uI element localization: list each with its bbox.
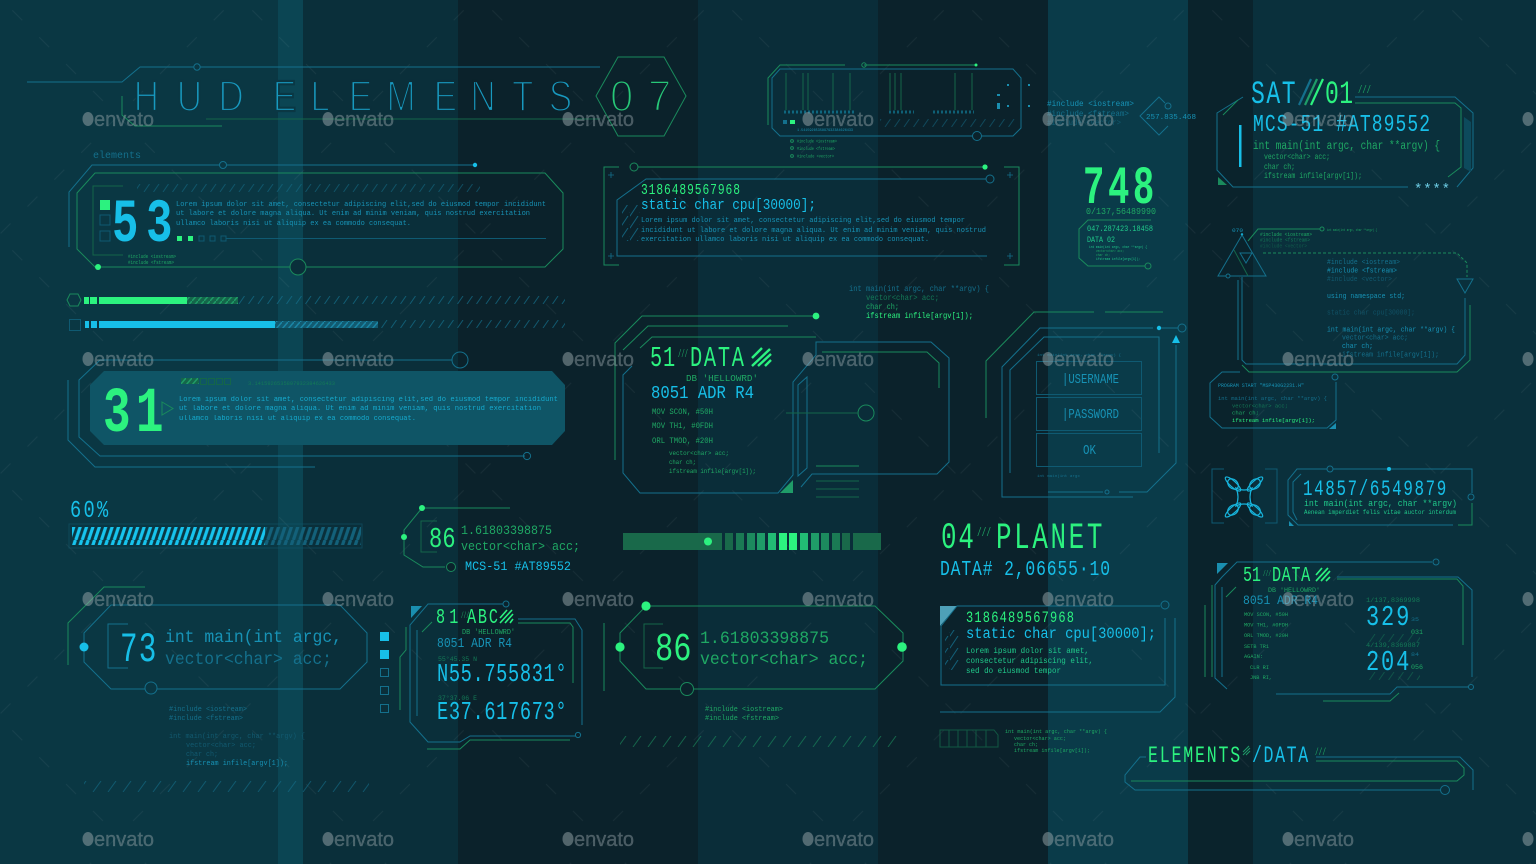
include list under chart: #include <iostream> [797, 138, 837, 144]
title: HUD ELEMENTS 07 [27, 57, 686, 136]
number block: 748: 0/137,56489990 [1086, 207, 1156, 217]
panel: 51 DATA right: CLR RI [1250, 665, 1269, 671]
panel: 81 ABC coordinates: 8051 ADR R4 [437, 636, 512, 652]
panel: static char upper: incididunt ut labore et dolore magna aliqua. Ut enim ad minim veniam, quis nostrud [641, 227, 986, 235]
panel: SAT 01: MCS-51 #AT89552 [1253, 112, 1430, 139]
panel: 51 DATA right [1205, 559, 1474, 701]
panel: 81 ABC coordinates: N55.755831° [437, 659, 567, 689]
panel: static char lower: static char cpu[30000]; [966, 625, 1156, 643]
panel: 51 DATA right: JNB RI, [1250, 675, 1272, 681]
panel: static char upper [604, 163, 1019, 265]
heading: ELEMENTS /DATA: /// [1315, 747, 1326, 759]
heading: ELEMENTS /DATA: ELEMENTS [1148, 744, 1240, 770]
panel: SAT 01: **** [1414, 182, 1450, 198]
panel: 51 DATA centre: char ch; [669, 459, 696, 466]
small code with block icons: char ch; [1014, 741, 1038, 748]
widget: small 86 readout: 86 [429, 523, 456, 556]
include list under chart: #include <vector> [797, 154, 834, 160]
small code with block icons: int main(int argc, char **argv) { [1005, 728, 1107, 735]
metric: 329: 35 [1411, 616, 1419, 623]
panel: static char lower [940, 601, 1175, 712]
panel: SAT 01: /// [1358, 85, 1371, 97]
panel: 81 ABC coordinates: 81 [436, 607, 458, 630]
panel: 81 ABC coordinates: E37.617673° [437, 697, 567, 727]
panel: 86 large readout: vector<char> acc; [700, 650, 868, 670]
panel: 53 text block: ullamco laboris nisi ut aliquip ex ea commodo consequat. [176, 220, 411, 228]
panel: static char lower: 3186489567968 [966, 610, 1074, 628]
panel: 31 filled text block: 3.1415926535897932384626433 [248, 381, 335, 387]
panel: SAT 01 [1217, 78, 1473, 198]
code block: centre: char ch; [866, 303, 899, 312]
code and diamond label top right: #include <vector> [1047, 119, 1121, 128]
panel: triangle code frame: char ch; [1342, 343, 1373, 351]
panel: 73 code readout [68, 587, 367, 694]
panel: 51 DATA centre: MOV SCON, #50H [652, 408, 713, 417]
metric: 329: 1/137,8369998 [1366, 597, 1420, 604]
panel: 51 DATA centre: MOV TH1, #0FDH [652, 422, 713, 431]
panel: 51 DATA right: SETB TR1 [1244, 644, 1269, 650]
field: password [1036, 398, 1142, 430]
code block: left bottom: #include <iostream> [169, 706, 247, 714]
watermarks: envato [1054, 829, 1114, 851]
watermarks: envato [574, 349, 634, 371]
panel: 73 code readout: 73 [120, 626, 156, 674]
watermarks: envato [1054, 109, 1114, 131]
panel: triangle code frame: #include <vector> [1260, 242, 1307, 250]
field: username [1036, 362, 1142, 394]
panel: program start: ifstream infile[argv[1]); [1232, 417, 1315, 424]
panel: program start: char ch; [1232, 410, 1259, 416]
watermarks: envato [94, 109, 154, 131]
panel: login form: int main(int argc [1037, 474, 1081, 479]
widget: small 86 readout [401, 505, 580, 574]
panel: triangle code frame: #include <fstream> [1327, 268, 1397, 276]
code block: left bottom: #include <fstream> [169, 715, 243, 723]
panel: 51 DATA right: 51 [1243, 565, 1261, 588]
code block: centre: vector<char> acc; [866, 294, 939, 303]
small code with block icons: vector<char> acc; [1014, 735, 1066, 742]
panel: 14857 readout [1288, 466, 1474, 526]
watermarks: envato [334, 589, 394, 611]
field: username: |USERNAME [1062, 372, 1119, 388]
panel: static char lower: sed do eiusmod tempor [966, 666, 1061, 676]
panel: 51 DATA right: MOV TH1, #0FDH [1244, 622, 1288, 628]
panel: triangle code frame: static char cpu[30000]; [1327, 310, 1415, 318]
heading: 04 PLANET [940, 517, 1110, 582]
panel: program start [1210, 372, 1338, 429]
panel: static char lower: Lorem ipsum dolor sit amet, [966, 646, 1089, 656]
heading: 04 PLANET: PLANET [996, 517, 1102, 560]
panel: 81 ABC coordinates: ABC [467, 607, 498, 630]
watermarks: envato [94, 589, 154, 611]
watermarks: envato [814, 349, 874, 371]
watermarks: envato [94, 829, 154, 851]
heading: 04 PLANET: 04 [941, 517, 974, 560]
panel: 51 DATA right: MOV SCON, #50H [1244, 612, 1288, 618]
panel: SAT 01: vector<char> acc; [1264, 153, 1330, 162]
panel: 51 DATA right: 8051 ADR R4 [1243, 593, 1318, 608]
panel: 51 DATA centre: 8051 ADR R4 [651, 384, 754, 404]
panel: 51 DATA right: ORL TMOD, #20H [1244, 633, 1288, 639]
code block: centre: int main(int argc, char **argv) { [849, 285, 989, 294]
title: HUD ELEMENTS 07: HUDE [134, 72, 296, 121]
watermarks: envato [1054, 349, 1114, 371]
metric: 204: 056 [1411, 664, 1423, 671]
gauge: 60 percent striped bar [69, 498, 362, 548]
number block: 748: DATA 02 [1087, 235, 1115, 245]
panel: 31 filled text block [68, 352, 565, 467]
panel: 53 text block [69, 162, 563, 275]
progress bar: green [67, 294, 565, 306]
watermarks: envato [814, 109, 874, 131]
indicator squares [380, 632, 389, 712]
panel: 51 DATA centre: ORL TMOD, #20H [652, 437, 713, 446]
small code with block icons [940, 728, 1107, 754]
panel: triangle code frame: vector<char> acc; [1342, 334, 1408, 342]
title: HUD ELEMENTS 07: 07 [610, 72, 671, 121]
watermarks: envato [1054, 589, 1114, 611]
panel: 51 DATA right: AGAIN: [1244, 654, 1263, 660]
panel: 53 text block: Lorem ipsum dolor sit amet, consectetur adipiscing elit,sed do eiusmod tempor incididunt [176, 201, 546, 209]
code block: left bottom: int main(int argc, char **argv) { [169, 733, 305, 741]
code and diamond label top right: 257.835.468 [1146, 114, 1196, 122]
code block: left bottom: char ch; [186, 751, 218, 759]
panel: triangle code frame: int main(int argc, char **argv) { [1327, 228, 1377, 233]
panel: 51 DATA right: DATA [1272, 565, 1310, 588]
panel: 53 text block: 53 [112, 191, 172, 259]
panel: program start: PROGRAM START "MSP430G2231.H" [1218, 382, 1304, 389]
panel: 51 DATA centre: ifstream infile[argv[1]); [669, 468, 756, 475]
panel: 51 DATA centre: vector<char> acc; [669, 450, 729, 457]
panel: 81 ABC coordinates: /// [461, 611, 469, 621]
panel: 51 DATA centre: DATA [690, 342, 744, 375]
panel: static char upper: 3186489567968 [641, 182, 740, 199]
title: HUD ELEMENTS 07: LEME [310, 72, 457, 121]
watermarks: envato [334, 829, 394, 851]
metric: 329: 329 [1366, 601, 1409, 634]
panel: 14857 readout: Aenean imperdiet felis vitae auctor interdum [1304, 509, 1456, 516]
widget: small 86 readout: MCS-51 #AT89552 [465, 560, 571, 574]
watermarks: envato [1294, 829, 1354, 851]
panel: SAT 01: ifstream infile[argv[1]); [1264, 172, 1362, 181]
panel: 51 DATA centre: DB 'HELLOWRD' [686, 374, 758, 384]
panel: login form: int main(int argc, char **argv) { [1037, 353, 1122, 358]
icon: drone in brackets [1212, 469, 1277, 523]
watermarks: envato [94, 349, 154, 371]
number block: 748: 047.287423.18458 [1087, 224, 1153, 234]
panel: program start: int main(int argc, char **argv) { [1218, 395, 1327, 402]
progress bar: blue [70, 320, 565, 330]
panel: program start: vector<char> acc; [1232, 402, 1288, 410]
panel: SAT 01: SAT [1251, 78, 1296, 113]
panel: triangle code frame [1218, 227, 1473, 372]
panel: 31 filled text block: ut labore et dolore magna aliqua. Ut enim ad minim veniam, quis nostrud exercitation [179, 405, 541, 413]
watermarks: envato [1294, 589, 1354, 611]
panel: 81 ABC coordinates: 37°37.06 E [438, 694, 477, 702]
segmented green bar [623, 533, 881, 550]
panel: SAT 01: char ch; [1264, 163, 1295, 172]
panel: 31 filled text block: 31 [103, 378, 163, 451]
panel: triangle code frame: using namespace std; [1327, 293, 1405, 301]
panel: triangle code frame: #include <vector> [1327, 276, 1392, 284]
title: HUD ELEMENTS 07: NTS [470, 72, 572, 121]
watermarks: envato [574, 589, 634, 611]
panel: triangle code frame: int main(int argc, char **argv) { [1327, 326, 1455, 334]
panel: 14857 readout: int main(int argc, char **argv) [1304, 498, 1457, 509]
panel: 86 large readout: 86 [655, 626, 691, 672]
label: elements: elements [93, 150, 141, 162]
heading: ELEMENTS /DATA: /DATA [1252, 744, 1309, 770]
panel: top chart schematic: 1.5415926535897932384626433 [797, 129, 854, 133]
watermarks: envato [334, 349, 394, 371]
code block: left bottom: ifstream infile[argv[1]); [186, 760, 288, 768]
number block: 748 [1079, 158, 1156, 269]
include list under chart: #include <fstream> [797, 146, 835, 152]
watermarks: envato [814, 589, 874, 611]
panel: 14857 readout: 14857/6549879 [1303, 477, 1446, 502]
code block: centre [849, 285, 989, 321]
watermarks: envato [574, 829, 634, 851]
widget: small 86 readout: vector<char> acc; [461, 540, 580, 554]
panel: static char lower: consectetur adipiscing elit, [966, 656, 1093, 666]
code block: centre: ifstream infile[argv[1]); [866, 312, 973, 321]
panel: 86 large readout: #include <fstream> [705, 715, 779, 723]
heading: 04 PLANET: /// [977, 526, 991, 540]
panel: 53 text block: ut labore et dolore magna aliqua. Ut enim ad minim veniam, quis nostrud exercitation [176, 210, 530, 218]
metric: 329 [1366, 597, 1423, 642]
panel: 53 text block: #include <fstream> [128, 260, 174, 266]
metric: 329: 031 [1411, 629, 1423, 636]
code and diamond label top right [1047, 97, 1196, 135]
panel: 53 text block: #include <iostream> [128, 254, 176, 260]
button: OK: OK [1083, 443, 1096, 459]
panel: triangle code frame: #include <fstream> [1260, 236, 1310, 244]
metric: 204 [1366, 642, 1423, 680]
metric: 204: 4/139,8369887 [1366, 642, 1420, 649]
panel: SAT 01: 01 [1325, 78, 1353, 113]
panel: 86 large readout: #include <iostream> [705, 706, 783, 714]
panel: 51 DATA centre [615, 313, 949, 497]
panel: static char upper: Lorem ipsum dolor sit amet, consectetur adipiscing elit,sed do eiusmod tempor [641, 217, 965, 225]
panel: 51 DATA right: /// [1263, 570, 1271, 579]
panel: 73 code readout: int main(int argc, [165, 628, 342, 648]
panel: 31 filled text block: Lorem ipsum dolor sit amet, consectetur adipiscing elit,sed do eiusmod tempor incididunt [179, 396, 558, 404]
panel: triangle code frame: ifstream infile[argv[1]); [1342, 352, 1439, 360]
panel: SAT 01: int main(int argc, char **argv) { [1253, 140, 1440, 153]
watermarks: envato [814, 829, 874, 851]
number block: 748: int main(int argc, char **argv) { [1089, 245, 1147, 250]
panel: 81 ABC coordinates [400, 601, 582, 749]
number block: 748: 748 [1083, 158, 1154, 220]
heading: ELEMENTS /DATA [1125, 744, 1473, 794]
watermarks: envato [334, 109, 394, 131]
panel: 51 DATA centre: /// [678, 349, 688, 361]
number block: 748: ifstream infile[argv[1]); [1096, 257, 1140, 262]
code and diamond label top right: #include <iostream> [1047, 100, 1134, 109]
panel: triangle code frame: 070 [1232, 227, 1243, 234]
panel: 51 DATA centre: 51 [650, 342, 675, 375]
watermarks: envato [1294, 109, 1354, 131]
button: OK [1036, 434, 1142, 466]
heading: 04 PLANET: DATA# 2,06655·10 [940, 557, 1110, 582]
panel: triangle code frame: #include <iostream> [1327, 259, 1400, 267]
panel: triangle code frame: #include <iostream> [1260, 231, 1312, 238]
panel: 81 ABC coordinates: DB 'HELLOWRD' [462, 629, 515, 637]
code block: left bottom [84, 706, 369, 792]
number block: 748: vector<char> acc; [1096, 249, 1124, 254]
metric: 204: 204 [1366, 646, 1409, 679]
panel: login form [986, 312, 1186, 497]
panel: 86 large readout: 1.61803398875 [700, 629, 829, 649]
watermarks: envato [1294, 349, 1354, 371]
panel: 31 filled text block: ullamco laboris nisi ut aliquip ex ea commodo consequat. [179, 415, 416, 423]
small code with block icons: ifstream infile[argv[1]); [1014, 747, 1090, 754]
widget: small 86 readout: 1.61803398875 [461, 524, 552, 538]
panel: static char upper: static char cpu[30000]; [641, 197, 816, 214]
panel: 86 large readout [604, 601, 907, 747]
panel: static char upper: exercitation ullamco laboris nisi ut aliquip ex ea commodo consequat. [641, 236, 929, 244]
panel: 73 code readout: vector<char> acc; [165, 650, 332, 670]
panel: top chart schematic [768, 63, 1030, 140]
gauge: 60 percent striped bar: 60% [70, 498, 108, 525]
code and diamond label top right: #include <fstream> [1047, 110, 1129, 119]
include list under chart [791, 138, 837, 160]
number block: 748: char ch; [1096, 253, 1110, 258]
metric: 204: 84 [1411, 651, 1420, 658]
watermarks: envato [574, 109, 634, 131]
panel: 51 DATA right: DB 'HELLOWRD' [1268, 587, 1320, 594]
field: password: |PASSWORD [1062, 407, 1119, 423]
panel: 81 ABC coordinates: 55°45.35 N [438, 655, 477, 663]
code block: left bottom: vector<char> acc; [186, 742, 256, 750]
